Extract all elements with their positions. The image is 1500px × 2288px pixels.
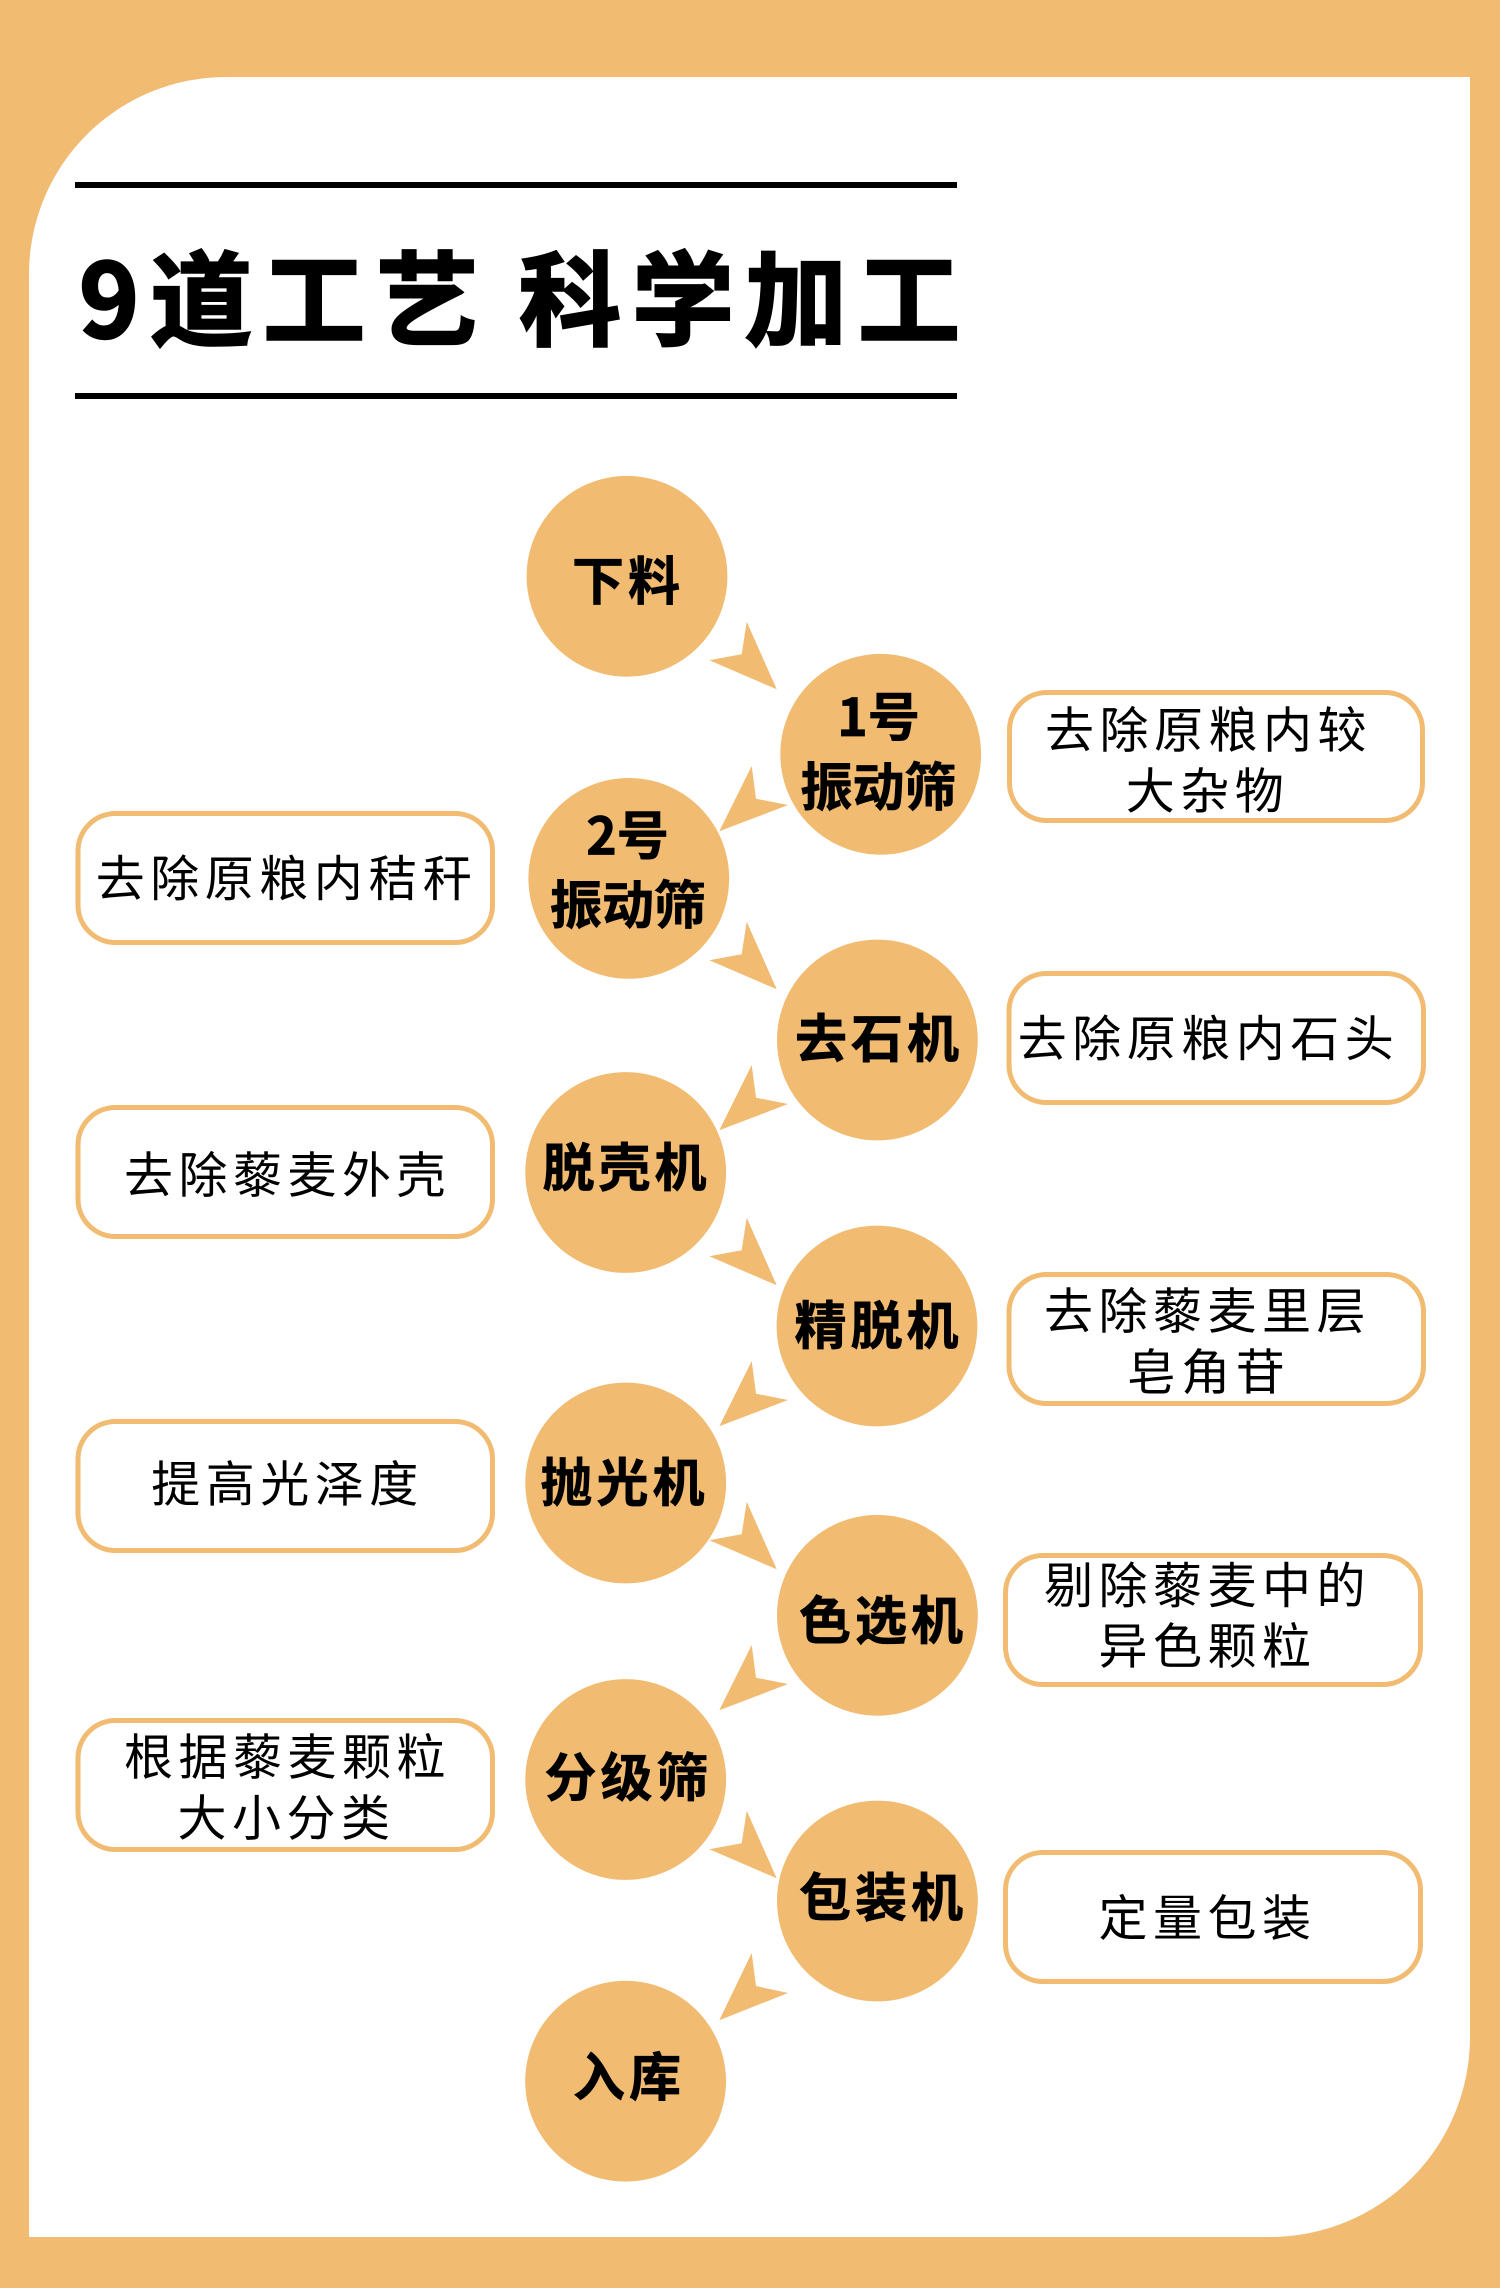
callout: 剔除藜麦中的异色颗粒 (1006, 1556, 1420, 1684)
title: 9道工艺 (79, 220, 489, 368)
node: 1号振动筛 (780, 654, 981, 855)
arrow: 包装机 to 入库 (719, 1953, 788, 2020)
node: 下料 (527, 476, 727, 677)
node: 2号振动筛 (528, 778, 729, 979)
arrow: 1号 to 2号 (719, 766, 788, 831)
title: 科学加工 (519, 220, 971, 368)
node: 2号振动筛: 2号 (586, 794, 669, 870)
callout: 根据藜麦颗粒大小分类 (78, 1720, 492, 1850)
title bottom rule (75, 393, 957, 399)
callout: 剔除藜麦中的异色颗粒: 剔除藜麦中的 (1044, 1560, 1371, 1614)
node: 脱壳机 (525, 1072, 726, 1273)
callout: 定量包装: 定量包装 (1098, 1892, 1317, 1946)
callout: 定量包装 (1006, 1852, 1420, 1982)
node: 去石机: 去石机 (795, 998, 963, 1072)
callout: 剔除藜麦中的异色颗粒: 异色颗粒 (1098, 1620, 1317, 1674)
arrow: 抛光机 to 色选机 (709, 1502, 777, 1569)
node: 2号振动筛: 振动筛 (550, 864, 706, 939)
left description boxes (78, 814, 492, 1850)
callout: 提高光泽度: 提高光泽度 (151, 1458, 424, 1512)
callout: 去除原粮内秸秆: 去除原粮内秸秆 (96, 853, 477, 907)
callout: 去除原粮内石头: 去除原粮内石头 (1018, 1013, 1399, 1067)
node: 包装机 (777, 1801, 978, 2001)
callout: 去除原粮内秸秆 (78, 814, 492, 942)
node: 色选机: 色选机 (799, 1580, 967, 1654)
callout: 根据藜麦颗粒大小分类: 大小分类 (177, 1792, 396, 1846)
arrow: 脱壳机 to 精脱机 (709, 1218, 777, 1285)
node: 色选机 (777, 1515, 978, 1716)
callout: 去除藜麦里层皂角苷 (1009, 1274, 1424, 1404)
callout: 去除原粮内石头 (1009, 974, 1424, 1102)
arrow: 分级筛 to 包装机 (709, 1811, 777, 1878)
node: 1号振动筛: 振动筛 (800, 746, 957, 821)
node: 分级筛: 分级筛 (544, 1736, 713, 1812)
title top rule (75, 182, 957, 188)
node: 入库 (525, 1981, 726, 2182)
node: 分级筛 (525, 1679, 726, 1880)
callout: 去除原粮内较大杂物: 去除原粮内较 (1045, 704, 1372, 758)
callout: 去除原粮内较大杂物: 大杂物 (1126, 766, 1289, 820)
node: 精脱机: 精脱机 (794, 1284, 963, 1360)
callout: 去除原粮内较大杂物 (1010, 692, 1422, 820)
callout: 去除藜麦外壳: 去除藜麦外壳 (124, 1150, 451, 1204)
arrow: 去石机 to 脱壳机 (719, 1065, 788, 1130)
callout: 去除藜麦里层皂角苷: 皂角苷 (1127, 1346, 1290, 1400)
node: 去石机 (777, 940, 978, 1140)
arrow: 下料 to 1号 (709, 622, 777, 689)
callout: 去除藜麦里层皂角苷: 去除藜麦里层 (1044, 1286, 1371, 1340)
callout: 去除藜麦外壳 (78, 1108, 492, 1236)
node: 精脱机 (777, 1226, 977, 1426)
node: 抛光机: 抛光机 (540, 1442, 709, 1516)
callout: 根据藜麦颗粒大小分类: 根据藜麦颗粒 (124, 1732, 451, 1786)
node: 抛光机 (525, 1383, 726, 1583)
node: 入库: 入库 (573, 2036, 685, 2111)
arrow: 色选机 to 分级筛 (719, 1645, 788, 1710)
node: 1号振动筛: 1号 (837, 676, 920, 751)
node: 脱壳机: 脱壳机 (542, 1126, 711, 1202)
node: 下料: 下料 (572, 540, 684, 615)
title block (75, 182, 971, 399)
callout: 提高光泽度 (78, 1422, 492, 1550)
arrow: 精脱机 to 抛光机 (719, 1361, 788, 1426)
right description boxes (1006, 692, 1424, 1982)
node: 包装机: 包装机 (799, 1856, 967, 1932)
process flow chart (525, 476, 981, 2182)
arrow: 2号 to 去石机 (709, 922, 777, 989)
